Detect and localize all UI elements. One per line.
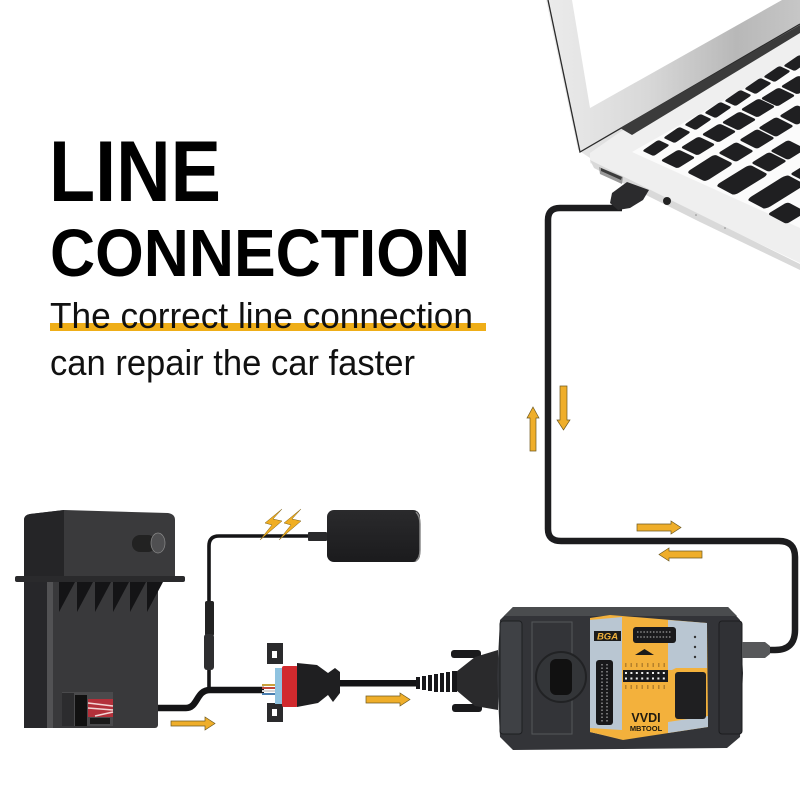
label: VVDI MBTOOL (630, 711, 663, 733)
programmer USB strain relief (742, 642, 770, 658)
power and signal cables (113, 536, 312, 708)
arrow: left along USB cable (659, 548, 702, 561)
cable to programmer (340, 680, 416, 686)
center pin row (623, 665, 668, 687)
subtitle with highlight bar: can repair the car faster (50, 342, 415, 383)
arrow: breakout box output (171, 717, 215, 730)
subtitle with highlight bar: The correct line connection (50, 295, 473, 336)
top port (633, 627, 676, 643)
breakout box (15, 510, 185, 728)
wire harness on box (62, 692, 113, 726)
BGA badge: BGA (597, 632, 618, 642)
barrel connector (204, 601, 214, 670)
label: VVDI MBTOOL: VVDI (631, 711, 661, 725)
arrow: right along USB cable (637, 521, 681, 534)
status lights (694, 636, 696, 658)
power adapter (308, 510, 420, 562)
icon: lightning bolts (260, 509, 301, 540)
title: LINE CONNECTION (49, 124, 470, 291)
USB cable from laptop to programmer (548, 182, 795, 650)
subtitle with highlight bar (50, 295, 486, 383)
title: LINE CONNECTION: LINE (49, 124, 221, 220)
laptop (546, 0, 800, 270)
arrow: toward programmer (366, 693, 410, 706)
VVDI MBTOOL programmer (497, 607, 743, 750)
DB connector (416, 650, 498, 712)
left pin socket (596, 660, 613, 725)
yellow panel (590, 615, 708, 740)
arrow: up along USB cable (527, 407, 539, 451)
arrow: down along USB cable (557, 386, 570, 430)
right socket (675, 672, 706, 719)
label: VVDI MBTOOL: MBTOOL (630, 724, 663, 733)
triangle marker (635, 649, 654, 655)
title: LINE CONNECTION: CONNECTION (50, 216, 470, 291)
OBD connector (262, 643, 340, 722)
